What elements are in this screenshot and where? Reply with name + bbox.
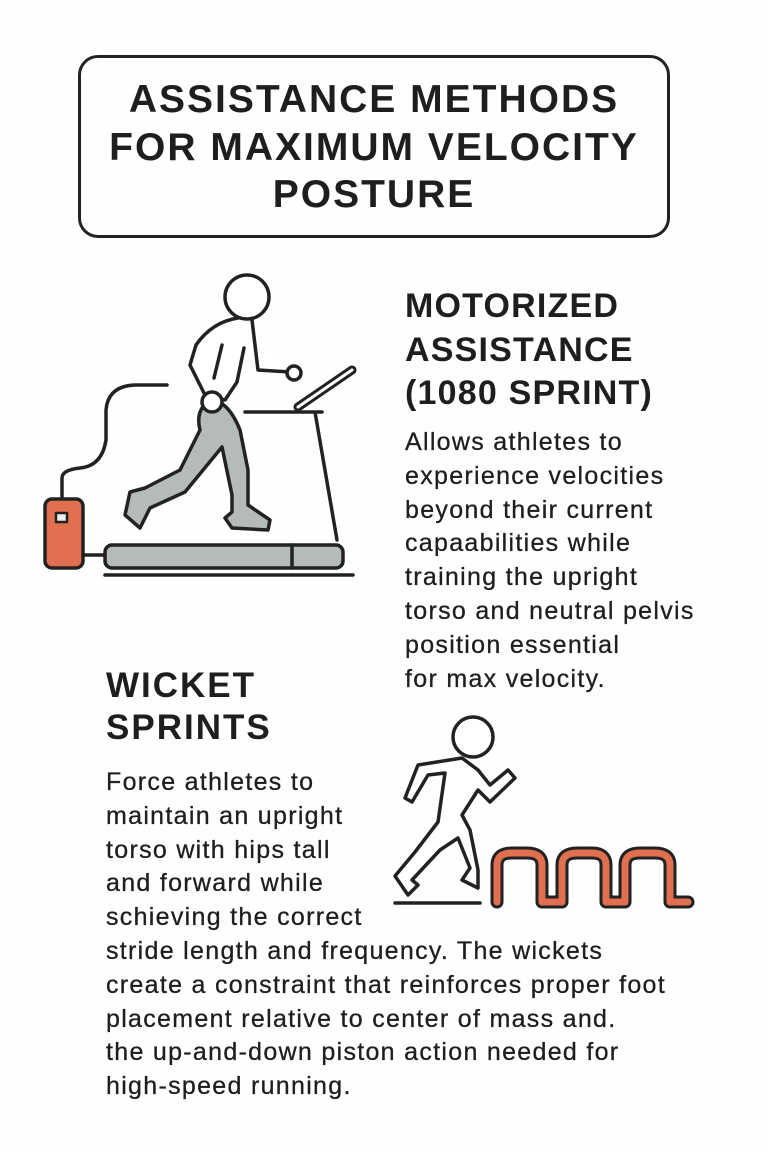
icon: treadmill runner bbox=[45, 275, 353, 575]
text: wicket description: placement relative to center of mass and. bbox=[106, 1005, 616, 1033]
text: motorized description: position essential bbox=[405, 631, 620, 659]
text: motorized description: experience velocities bbox=[405, 462, 664, 490]
text: wicket description: stride length and frequency. The wickets bbox=[106, 937, 603, 965]
heading: wicket sprints bbox=[106, 666, 272, 747]
text: wicket description: high-speed running. bbox=[106, 1072, 352, 1100]
heading: motorized assistance: MOTORIZED bbox=[405, 287, 619, 325]
heading: motorized assistance: (1080 SPRINT) bbox=[405, 374, 653, 412]
text: wicket description: schieving the correct bbox=[106, 903, 363, 931]
text: motorized description: Allows athletes to bbox=[405, 428, 623, 456]
heading: wicket sprints: SPRINTS bbox=[106, 708, 272, 747]
text: motorized description: training the upright bbox=[405, 563, 638, 591]
text: wicket description: and forward while bbox=[106, 869, 324, 897]
text: wicket description: Force athletes to bbox=[106, 768, 314, 796]
text: motorized description: beyond their current bbox=[405, 496, 653, 524]
text: wicket description: the up-and-down piston action needed for bbox=[106, 1038, 619, 1066]
heading: wicket sprints: WICKET bbox=[106, 666, 256, 705]
icon: wickets bbox=[497, 853, 688, 902]
text: motorized description bbox=[404, 428, 695, 693]
text: wicket description: maintain an upright bbox=[106, 802, 343, 830]
text: wicket description: create a constraint that reinforces proper foot bbox=[106, 971, 666, 999]
title box: POSTURE bbox=[273, 173, 475, 216]
heading: motorized assistance: ASSISTANCE bbox=[405, 330, 634, 368]
text: motorized description: torso and neutral pelvis bbox=[405, 597, 695, 625]
title box bbox=[78, 55, 670, 238]
icon: wicket runner bbox=[395, 717, 515, 903]
text: motorized description: capaabilities while bbox=[405, 529, 631, 557]
title box: FOR MAXIMUM VELOCITY bbox=[109, 126, 639, 168]
text: wicket description: torso with hips tall bbox=[106, 836, 331, 864]
text: motorized description: for max velocity. bbox=[405, 665, 606, 693]
text: wicket description bbox=[106, 768, 666, 1100]
title box: ASSISTANCE METHODS bbox=[129, 78, 619, 121]
heading: motorized assistance bbox=[405, 287, 653, 412]
